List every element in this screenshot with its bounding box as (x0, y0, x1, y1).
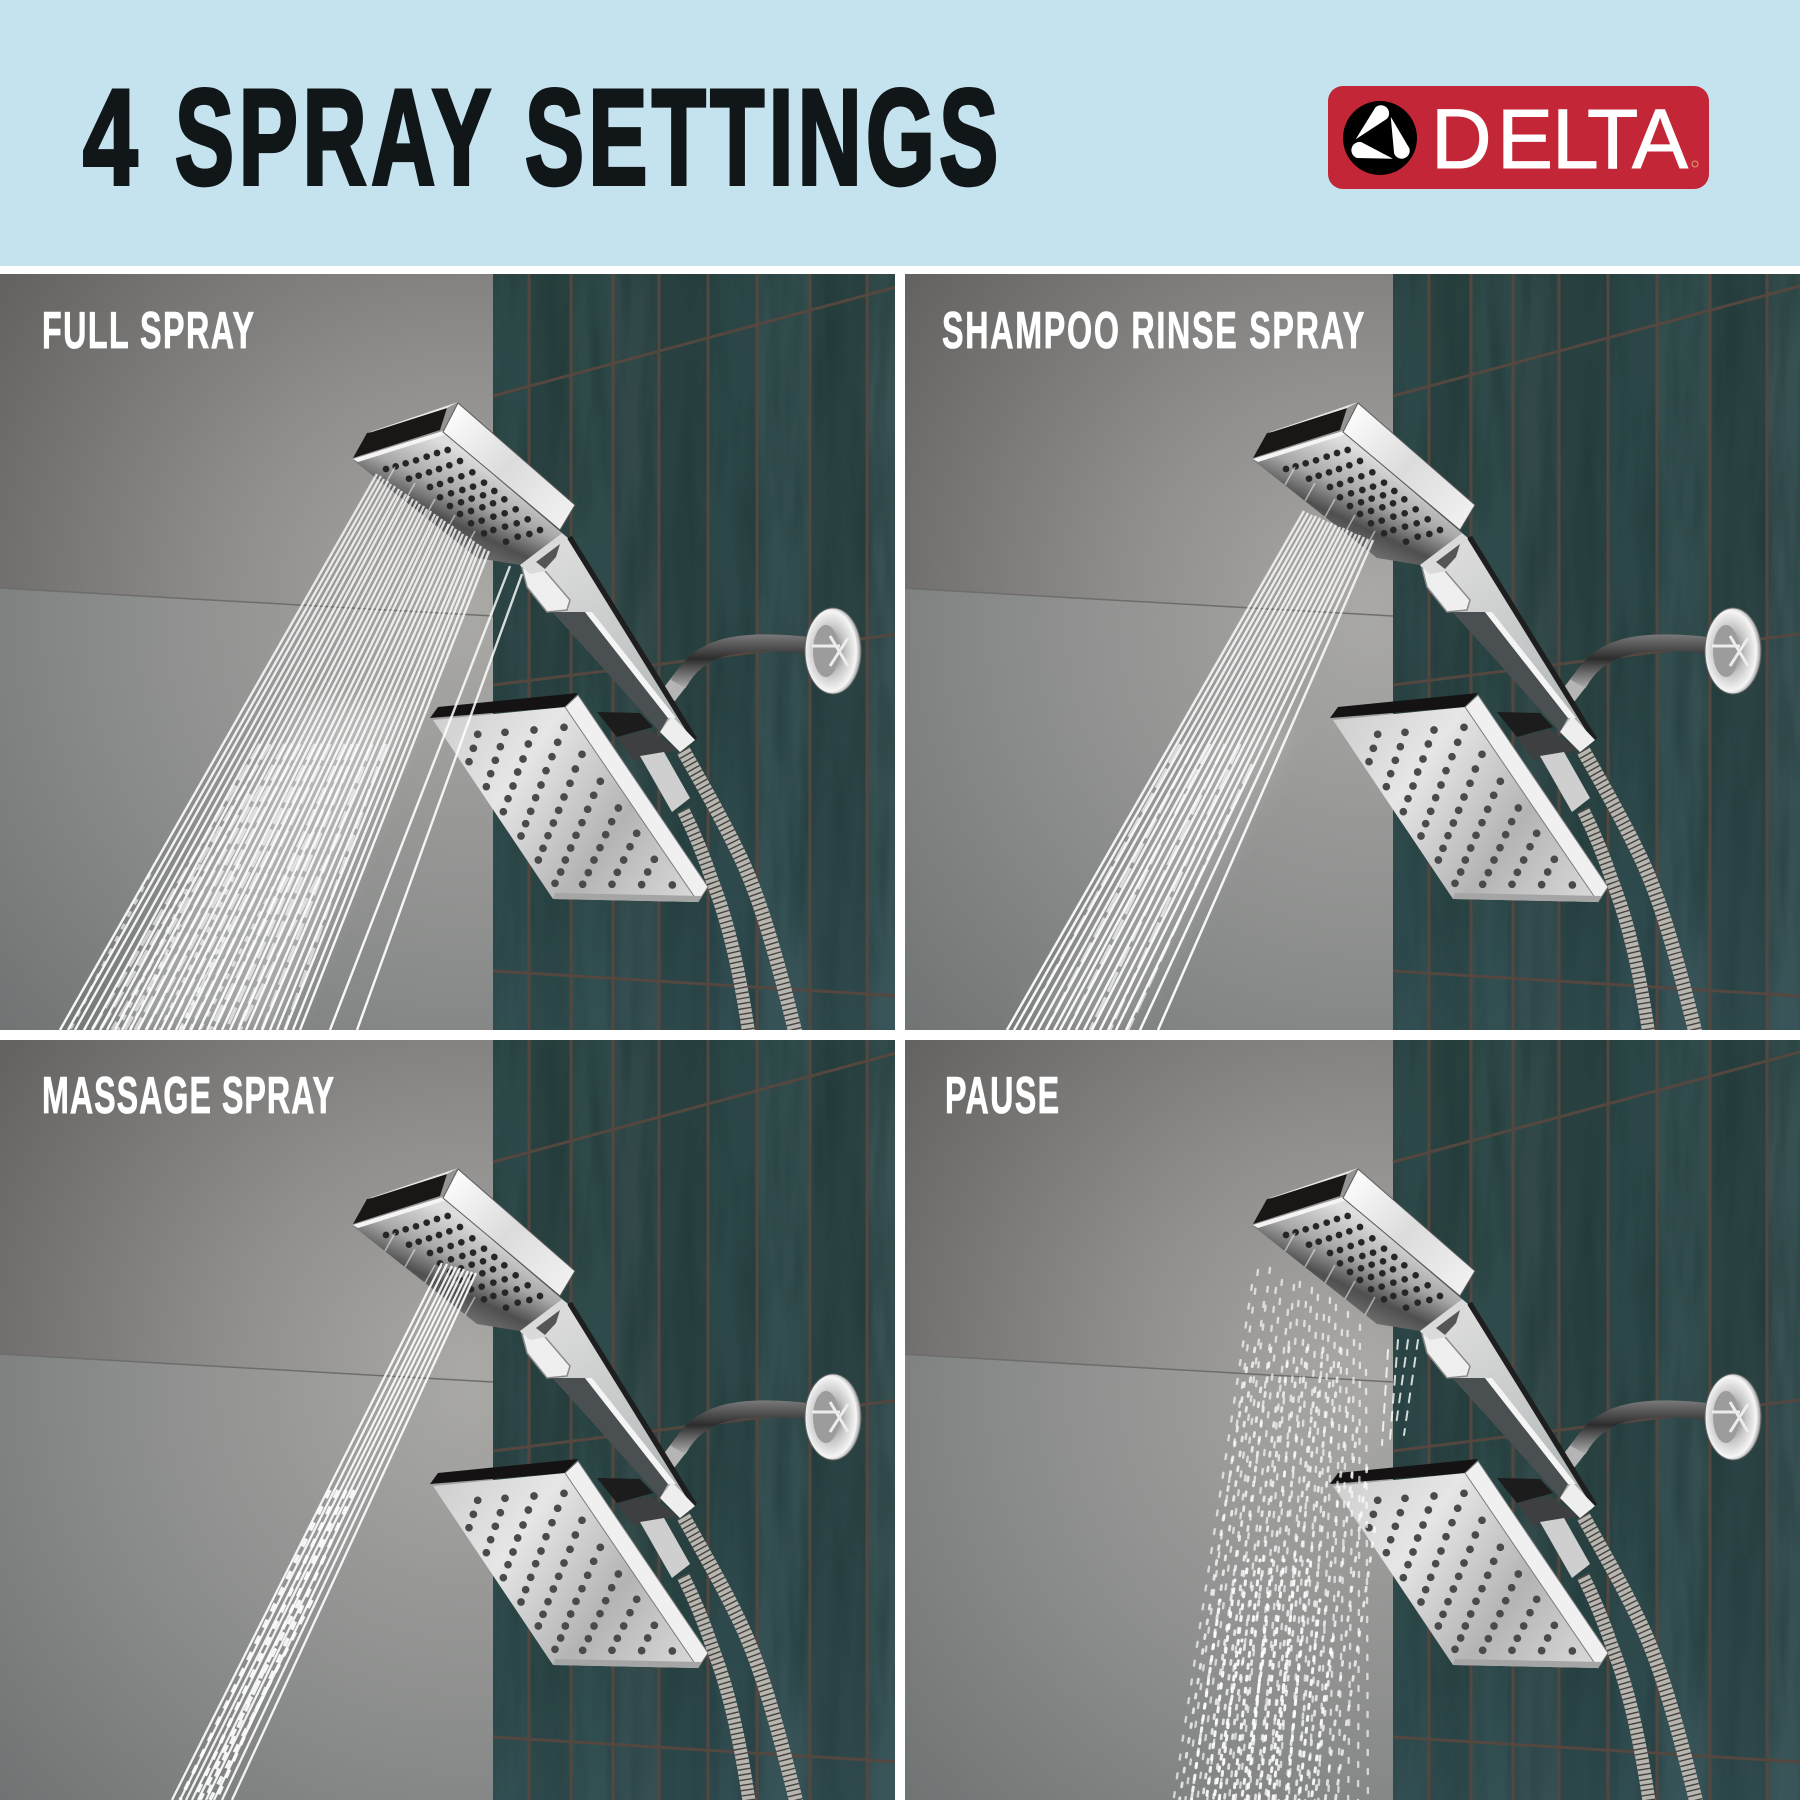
shower fixture (1253, 402, 1761, 1064)
shower fixture (1253, 1168, 1761, 1800)
label: massage spray: MASSAGE SPRAY (42, 1067, 334, 1125)
header band (0, 0, 1800, 266)
spray: pause droplets (1172, 1268, 1418, 1800)
spray: full (60, 474, 522, 1030)
shower fixture (353, 1168, 861, 1800)
shower fixture (353, 402, 861, 1064)
spray: massage (172, 1263, 476, 1800)
panel: shampoo rinse spray (900, 274, 1800, 1074)
logo: Delta (1328, 86, 1709, 189)
label: full spray: FULL SPRAY (42, 302, 254, 360)
title: SPRAY (175, 62, 491, 214)
spray: shampoo rinse (1007, 511, 1373, 1030)
panel: full spray (0, 274, 900, 1074)
title: SETTINGS (525, 62, 998, 214)
logo: Delta: DELTA (1431, 92, 1688, 186)
title: 4 (83, 62, 138, 214)
title (83, 62, 998, 214)
label: pause: PAUSE (945, 1067, 1059, 1125)
panel: massage spray (0, 1040, 900, 1800)
panel: pause (900, 1040, 1800, 1800)
label: shampoo rinse spray: SHAMPOO RINSE SPRAY (942, 302, 1364, 360)
